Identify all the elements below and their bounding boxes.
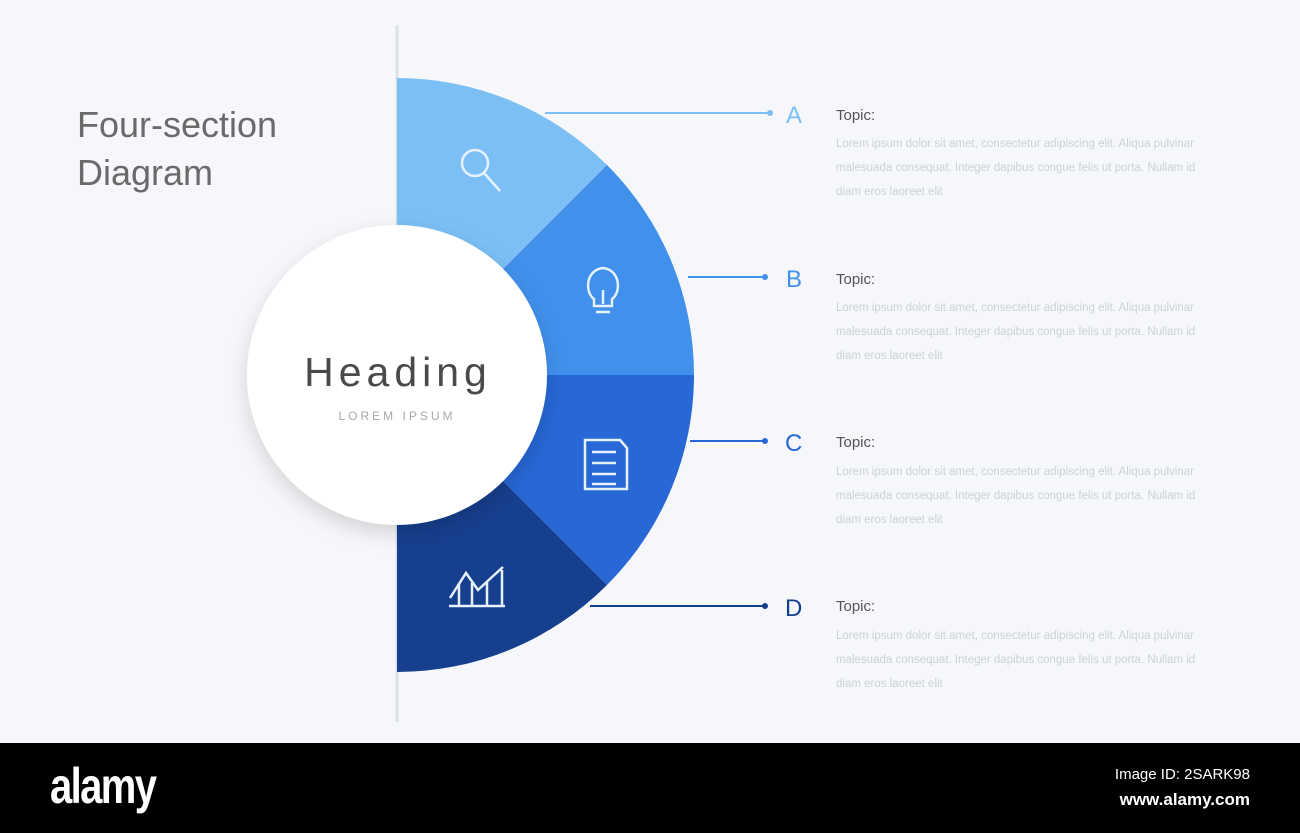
sector A (397, 78, 607, 375)
connector C: C (785, 430, 802, 457)
text block C: Topic: (836, 434, 875, 451)
connector B: B (786, 266, 802, 293)
text block B (836, 271, 1195, 362)
sector B (397, 165, 694, 375)
logo: alamy (50, 758, 157, 814)
text block D: Lorem ipsum dolor sit amet, consectetur adipiscing elit. Aliqua pulvinar (836, 630, 1194, 642)
image id: Image ID: 2SARK98 (1115, 766, 1250, 783)
icon: bulb (588, 268, 618, 312)
text block D: diam eros laoreet elit (836, 678, 944, 690)
text block C (836, 434, 1195, 526)
connector A: A (786, 102, 802, 129)
text block C: malesuada consequat. Integer dapibus congue felis ut porta. Nullam id (836, 490, 1195, 502)
text block B: diam eros laoreet elit (836, 350, 944, 362)
icon: document (585, 440, 627, 489)
text block C: Lorem ipsum dolor sit amet, consectetur adipiscing elit. Aliqua pulvinar (836, 466, 1194, 478)
text block A: Lorem ipsum dolor sit amet, consectetur adipiscing elit. Aliqua pulvinar (836, 138, 1194, 150)
icon: magnifier (462, 150, 500, 191)
title: Diagram (77, 152, 213, 193)
icon: chart (449, 567, 505, 606)
text block B: malesuada consequat. Integer dapibus congue felis ut porta. Nullam id (836, 326, 1195, 338)
text block D: Topic: (836, 598, 875, 615)
connector D: D (785, 595, 802, 622)
text block D: malesuada consequat. Integer dapibus congue felis ut porta. Nullam id (836, 654, 1195, 666)
semicircle diagram (397, 78, 694, 672)
heading: LOREM IPSUM (338, 409, 456, 423)
text block A (836, 107, 1195, 198)
center circle (247, 225, 547, 525)
text block D (836, 598, 1195, 690)
sector D (397, 375, 607, 672)
footer bar (0, 743, 1300, 833)
connector A (545, 102, 802, 129)
heading: Heading (304, 349, 492, 395)
footer bar: www.alamy.com (1119, 790, 1250, 809)
text block A: diam eros laoreet elit (836, 186, 944, 198)
connector C (690, 430, 802, 457)
heading (304, 349, 492, 423)
connector D (590, 595, 802, 622)
sector C (397, 375, 694, 585)
text block B: Topic: (836, 271, 875, 288)
text block A: Topic: (836, 107, 875, 124)
connector B (688, 266, 802, 293)
text block A: malesuada consequat. Integer dapibus congue felis ut porta. Nullam id (836, 162, 1195, 174)
text block B: Lorem ipsum dolor sit amet, consectetur adipiscing elit. Aliqua pulvinar (836, 302, 1194, 314)
title: Four-section (77, 104, 277, 145)
text block C: diam eros laoreet elit (836, 514, 944, 526)
title (77, 104, 277, 193)
